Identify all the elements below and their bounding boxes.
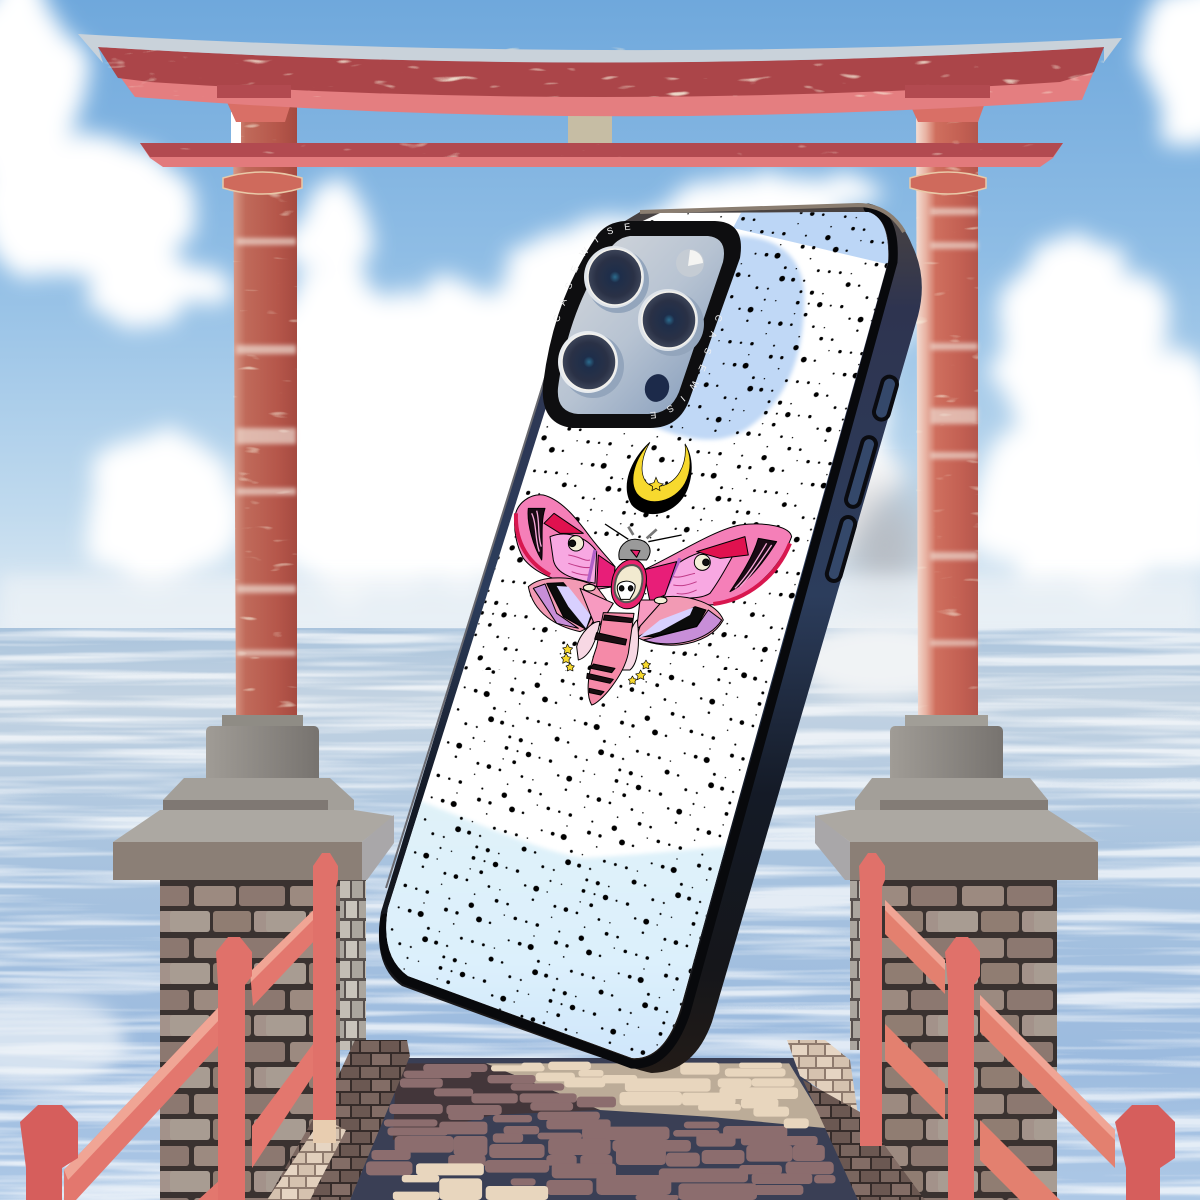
- beam caps over pillars: [217, 85, 291, 98]
- torii gate: [78, 34, 1122, 718]
- right lower wing: [637, 596, 723, 645]
- yellow stars: [561, 644, 651, 684]
- blue sheen top: [734, 212, 888, 264]
- centre strut: [568, 104, 612, 144]
- right pillar: [908, 100, 986, 718]
- dot pattern lower: [390, 670, 768, 1056]
- left upper wing: [515, 495, 615, 590]
- right walkway curb: [787, 1040, 925, 1200]
- head and antennae: [605, 524, 682, 560]
- rails: [64, 992, 240, 1200]
- crescent moon: [627, 442, 692, 514]
- lens bottom: [558, 331, 624, 398]
- right upper wing: [643, 524, 792, 605]
- lower crossbeam: [140, 143, 1063, 167]
- camera surround: [542, 221, 741, 428]
- case inner bezel: [384, 208, 893, 1064]
- wing eye spots: [583, 584, 667, 604]
- lens right: [638, 289, 704, 356]
- casewise lettering: CASEWISE: [650, 315, 722, 419]
- blue sheen bottom: [386, 800, 726, 1058]
- hazy horizon: [0, 575, 1200, 635]
- casewise lettering: CASEWISE: [554, 223, 630, 322]
- dot pattern upper: [464, 212, 888, 670]
- sea: [0, 622, 1200, 1200]
- left pillar base: [113, 715, 394, 1200]
- left lower wing: [528, 578, 613, 632]
- hind wings: [577, 620, 638, 670]
- printed back: [386, 212, 888, 1058]
- stone paved walkway: [267, 1040, 925, 1200]
- lidar: [641, 371, 673, 405]
- clouds: [0, 0, 1200, 635]
- right red railing: [859, 853, 1175, 1200]
- left pillar: [223, 100, 302, 718]
- abdomen: [587, 613, 634, 705]
- left walkway curb: [267, 1040, 410, 1200]
- casewise lettering: [554, 223, 722, 419]
- phone in case: [378, 203, 922, 1073]
- sky background: [0, 0, 1200, 640]
- case edge highlight: [386, 238, 598, 888]
- case shell: [379, 205, 922, 1073]
- moth illustration: [515, 495, 792, 705]
- top beam: [78, 34, 1122, 116]
- right pillar base: [815, 715, 1098, 1200]
- flash: [676, 249, 704, 277]
- side buttons: [825, 375, 899, 583]
- posts: [313, 853, 338, 1143]
- camera plate: [558, 236, 724, 414]
- left red railing: [20, 853, 338, 1200]
- thorax and skull: [611, 559, 646, 609]
- lens top: [584, 246, 649, 313]
- paving stones: [366, 1062, 836, 1200]
